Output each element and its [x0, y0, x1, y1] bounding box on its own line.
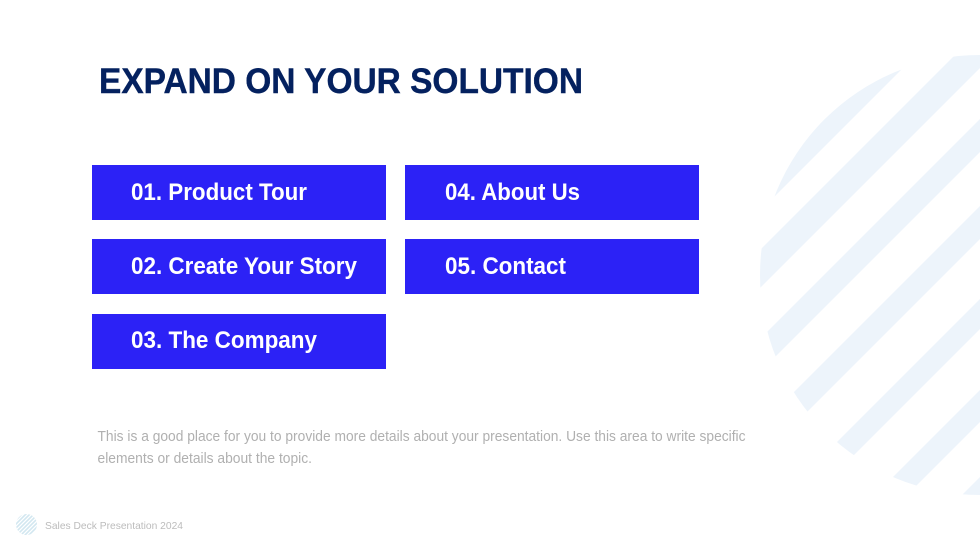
- description text: elements or details about the topic.: [98, 451, 312, 467]
- button: 05 Contact: 05. Contact: [445, 253, 566, 280]
- footer text: Sales Deck Presentation 2024: [45, 520, 183, 532]
- title: EXPAND ON YOUR SOLUTION: [99, 62, 583, 101]
- button: 02 Create Your Story: [92, 239, 386, 294]
- description text: This is a good place for you to provide more details about your presentation. Use this area to write specific: [98, 429, 746, 445]
- button: 01 Product Tour: 01. Product Tour: [131, 179, 307, 206]
- button: 04 About Us: 04. About Us: [445, 179, 580, 206]
- button: 04 About Us: [405, 165, 699, 220]
- button: 03 The Company: 03. The Company: [131, 327, 318, 354]
- background: striped circle: [755, 50, 980, 500]
- description text: [98, 429, 746, 467]
- icon: footer striped circle: [16, 514, 37, 535]
- button: 02 Create Your Story: 02. Create Your Story: [131, 253, 358, 280]
- button: 05 Contact: [405, 239, 699, 294]
- button: 03 The Company: [92, 314, 386, 369]
- button: 01 Product Tour: [92, 165, 386, 220]
